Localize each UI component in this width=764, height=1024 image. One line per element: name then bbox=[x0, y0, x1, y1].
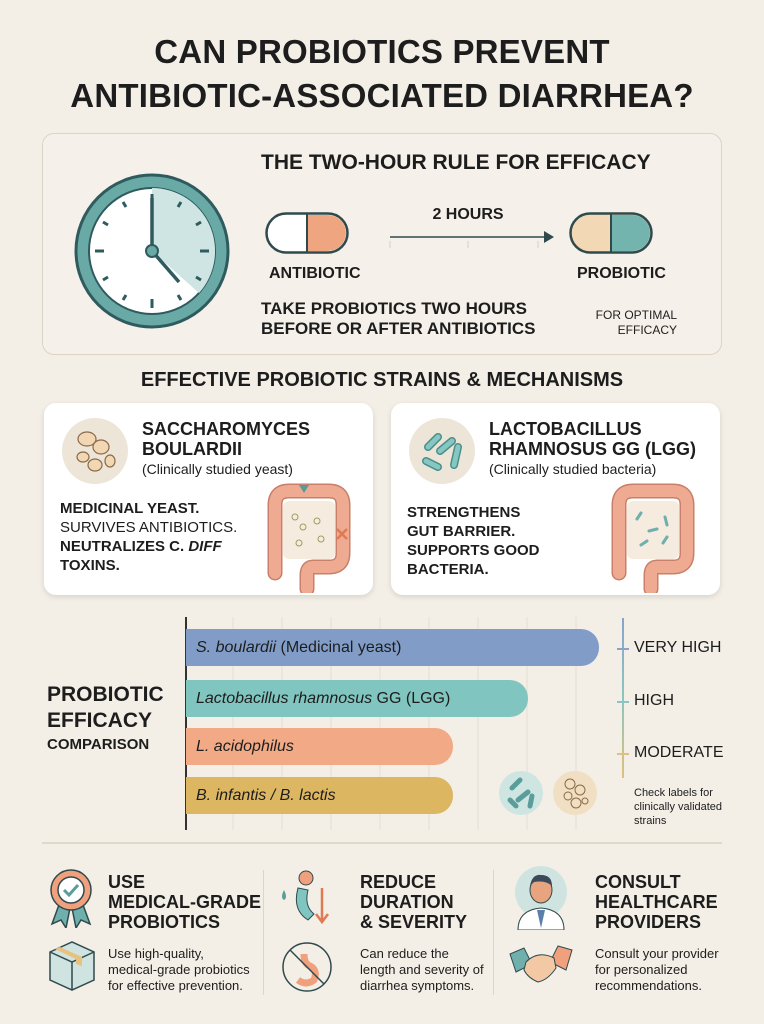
bar: LGG bbox=[186, 680, 528, 717]
icon: reduce bbox=[282, 870, 329, 924]
legend scale: strains bbox=[634, 815, 666, 827]
chart: efficacy comparison: COMPARISON bbox=[47, 736, 149, 753]
legend scale: VERY HIGH bbox=[634, 639, 721, 656]
text: MEDICINAL YEAST. bbox=[60, 500, 199, 517]
bar: L. acidophilus: L. acidophilus bbox=[196, 738, 294, 755]
text: SUPPORTS GOOD bbox=[407, 542, 540, 559]
tip 3 text: for personalized bbox=[595, 962, 688, 977]
grid bbox=[185, 617, 576, 830]
bar: L. acidophilus bbox=[186, 728, 453, 765]
text: BACTERIA. bbox=[407, 561, 489, 578]
icon: handshake bbox=[509, 945, 573, 982]
tip 1 text: for effective prevention. bbox=[108, 978, 243, 993]
title bbox=[70, 33, 694, 114]
tip 1 text: medical-grade probiotics bbox=[108, 962, 250, 977]
icon: gut bbox=[268, 484, 350, 593]
icon: probiotic pill bbox=[569, 212, 653, 254]
tip 1 title: USE bbox=[108, 872, 145, 892]
text: instruction: TAKE PROBIOTICS TWO HOURS bbox=[261, 299, 527, 318]
heading: THE TWO-HOUR RULE FOR EFFICACY bbox=[261, 151, 651, 174]
panel: two-hour rule bbox=[42, 133, 722, 355]
tip 2 title: DURATION bbox=[360, 892, 454, 912]
icon: yeast bbox=[62, 418, 128, 484]
text: optimal: EFFICACY bbox=[618, 323, 677, 337]
tip 1 text: Use high-quality, bbox=[108, 946, 204, 961]
tip 1 title bbox=[108, 872, 261, 932]
legend scale bbox=[617, 618, 723, 827]
icon: bacteria circle bbox=[499, 771, 543, 815]
text: SURVIVES ANTIBIOTICS. bbox=[60, 519, 237, 536]
tip 2 text: Can reduce the bbox=[360, 946, 449, 961]
legend scale: MODERATE bbox=[634, 744, 723, 761]
tip 1 title: MEDICAL-GRADE bbox=[108, 892, 261, 912]
icon: clock bbox=[74, 174, 230, 328]
tip 3 title: HEALTHCARE bbox=[595, 892, 718, 912]
tip 1 title: PROBIOTICS bbox=[108, 912, 220, 932]
title: SACCHAROMYCES bbox=[142, 419, 310, 439]
title: CAN PROBIOTICS PREVENT bbox=[154, 33, 610, 70]
chart label: PROBIOTIC bbox=[47, 683, 164, 706]
arrow: 2 hours: 2 HOURS bbox=[432, 206, 504, 223]
tip 2 title bbox=[360, 872, 467, 932]
panel: lactobacillus card: (Clinically studied bacteria) bbox=[489, 461, 656, 477]
legend scale: Check labels for bbox=[634, 787, 713, 799]
tip 3 title bbox=[595, 872, 718, 932]
chart label bbox=[47, 683, 164, 732]
bar: LGG: Lactobacillus rhamnosus GG (LGG) bbox=[196, 690, 450, 707]
tip 2 text bbox=[360, 946, 484, 993]
legend scale: clinically validated bbox=[634, 801, 722, 813]
icon: award ribbon bbox=[50, 869, 92, 928]
tip 3 text bbox=[595, 946, 719, 993]
tip 3 text: Consult your provider bbox=[595, 946, 719, 961]
text: optimal: FOR OPTIMAL bbox=[596, 308, 677, 322]
text: NEUTRALIZES C. DIFF bbox=[60, 538, 222, 555]
bar: s. boulardii bbox=[186, 629, 599, 666]
chart label: EFFICACY bbox=[47, 709, 152, 732]
chart: efficacy comparison bbox=[47, 617, 723, 830]
text bbox=[60, 500, 237, 574]
bar: B. infantis bbox=[186, 777, 453, 814]
text: GUT BARRIER. bbox=[407, 523, 515, 540]
label probiotic: PROBIOTIC bbox=[577, 265, 666, 282]
title bbox=[489, 419, 696, 459]
text bbox=[407, 504, 540, 578]
tip 2 text: diarrhea symptoms. bbox=[360, 978, 474, 993]
text: STRENGTHENS bbox=[407, 504, 520, 521]
tip 2 text: length and severity of bbox=[360, 962, 484, 977]
text: instruction: BEFORE OR AFTER ANTIBIOTICS bbox=[261, 319, 536, 338]
legend scale: HIGH bbox=[634, 692, 674, 709]
panel: saccharomyces card: (Clinically studied yeast) bbox=[142, 461, 293, 477]
text: TOXINS. bbox=[60, 557, 120, 574]
panel: lactobacillus card bbox=[391, 403, 720, 595]
title: RHAMNOSUS GG (LGG) bbox=[489, 439, 696, 459]
label antibiotic: ANTIBIOTIC bbox=[269, 265, 361, 282]
panel: saccharomyces card bbox=[44, 403, 373, 595]
icon: bacteria bbox=[409, 418, 475, 484]
tip 3 title: PROVIDERS bbox=[595, 912, 701, 932]
icon: stomach no bbox=[282, 942, 332, 992]
icon: box bbox=[49, 941, 95, 991]
title: ANTIBIOTIC-ASSOCIATED DIARRHEA? bbox=[70, 77, 694, 114]
text: optimal bbox=[596, 308, 677, 337]
icon: antibiotic pill bbox=[265, 212, 349, 254]
icon: doctor bbox=[515, 866, 567, 930]
section heading: EFFECTIVE PROBIOTIC STRAINS & MECHANISMS bbox=[141, 369, 623, 391]
tip 1 text bbox=[108, 946, 250, 993]
icon: yeast circle bbox=[553, 771, 597, 815]
title: LACTOBACILLUS bbox=[489, 419, 642, 439]
bar: B. infantis: B. infantis / B. lactis bbox=[196, 787, 336, 804]
arrow: 2 hours bbox=[390, 206, 554, 248]
bar: s. boulardii: S. boulardii (Medicinal yeast) bbox=[196, 639, 401, 656]
icon: gut bbox=[612, 484, 694, 593]
tip 3 title: CONSULT bbox=[595, 872, 681, 892]
text: instruction bbox=[261, 299, 536, 338]
tip 2 title: & SEVERITY bbox=[360, 912, 467, 932]
tip 3 text: recommendations. bbox=[595, 978, 702, 993]
title bbox=[142, 419, 310, 459]
panel: bottom tips bbox=[49, 866, 719, 995]
tip 2 title: REDUCE bbox=[360, 872, 436, 892]
title: BOULARDII bbox=[142, 439, 242, 459]
